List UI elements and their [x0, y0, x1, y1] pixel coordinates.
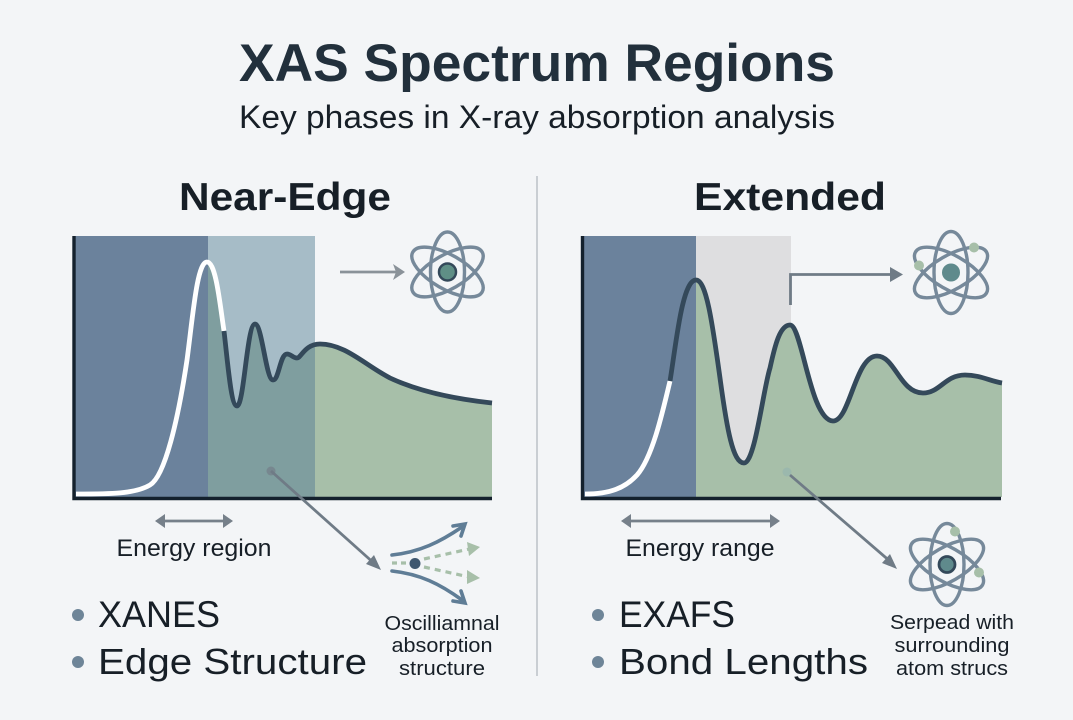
caption: surrounding atoms: [890, 612, 1014, 680]
caption: oscillation: absorption: [392, 635, 492, 657]
callout arrow to oscillation icon: [266, 466, 381, 570]
axes: [582, 236, 1001, 498]
bullet list: near-edge: Edge Structure: [98, 641, 367, 682]
arrow: to atom: [340, 264, 405, 280]
icon: scattering paths: [392, 524, 480, 603]
heading: near-edge: Near-Edge: [179, 176, 391, 219]
arrow: elbow to atom: [790, 267, 903, 305]
chart: extended spectrum: [582, 236, 1002, 498]
overlap of near-edge band and fill: [208, 262, 315, 497]
curve: white rising section: [76, 262, 224, 494]
label: energy range: Energy range: [626, 535, 774, 562]
bullet list: near-edge: [72, 594, 367, 682]
region: pre-edge band: [583, 236, 696, 497]
curve: dark oscillating section: [224, 324, 492, 406]
arrow: energy range span: [621, 514, 780, 528]
bullet list: extended: EXAFS: [619, 594, 735, 635]
arrow: energy region span: [155, 514, 233, 528]
region: near-edge band: [208, 236, 315, 497]
subtitle: Key phases in X-ray absorption analysis: [239, 99, 835, 135]
title: XAS Spectrum Regions: [239, 34, 835, 93]
panel: near-edge: [72, 176, 500, 682]
caption: oscillation: structure: [399, 658, 485, 680]
caption: surrounding atoms: atom strucs: [896, 658, 1008, 680]
bullet list: near-edge: XANES: [98, 594, 220, 635]
icon: atom: [404, 232, 491, 312]
heading: extended: Extended: [694, 176, 886, 219]
curve: white rising section: [585, 381, 670, 494]
callout arrow to lower atom: [782, 468, 897, 569]
caption: oscillation: [384, 613, 500, 680]
bullet list: extended: Bond Lengths: [619, 641, 868, 682]
icon: atom with surrounding atoms: [903, 524, 991, 606]
bullet list: extended: [592, 594, 868, 682]
panel: extended: [582, 176, 1014, 682]
icon: atom with electrons: [907, 232, 995, 314]
label: energy region: Energy region: [116, 535, 272, 562]
caption: surrounding atoms: surrounding: [894, 635, 1010, 657]
absorption fill under curve: [208, 262, 492, 497]
region: extended band: [696, 236, 791, 497]
caption: surrounding atoms: Serpead with: [890, 612, 1014, 634]
region: pre-edge band: [74, 236, 208, 497]
axes: [74, 236, 492, 498]
curve: dark oscillating section: [670, 280, 1002, 463]
caption: oscillation: Oscilliamnal: [384, 613, 500, 635]
chart: near-edge spectrum: [74, 236, 492, 498]
absorption fill under curve: [696, 280, 1002, 497]
